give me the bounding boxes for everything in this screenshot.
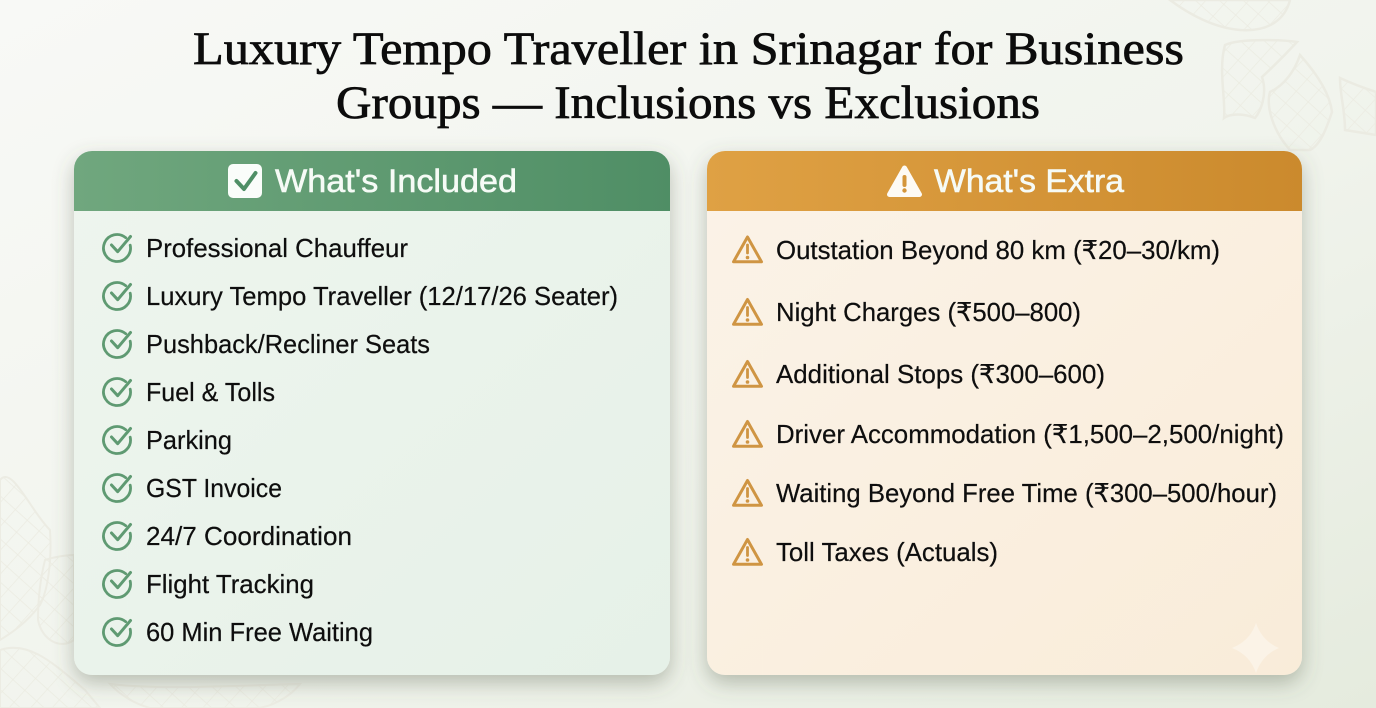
ornament: bottom left lattice (0, 477, 300, 708)
panel card (74, 151, 670, 675)
item: waiting beyond free time: Waiting Beyond Free Time (₹300–500/hour) (776, 478, 1277, 508)
title (193, 23, 1184, 129)
item: gst invoice: GST Invoice (146, 473, 282, 503)
item: additional stops: Additional Stops (₹300–600) (776, 359, 1105, 389)
item: outstation: Outstation Beyond 80 km (₹20–30/km) (776, 235, 1220, 265)
icon: white warning triangle (890, 168, 920, 194)
item: driver accommodation: Driver Accommodation (₹1,500–2,500/night) (776, 419, 1284, 449)
ornament: top right lattice (1170, 0, 1376, 150)
panel card (707, 151, 1302, 675)
item: 60 min free waiting: 60 Min Free Waiting (146, 617, 373, 647)
heading: What's Included (275, 163, 517, 199)
item: fuel and tolls: Fuel & Tolls (146, 377, 275, 407)
item: professional chauffeur: Professional Chauffeur (146, 233, 408, 263)
header bar (707, 151, 1302, 211)
icon: sparkle (1232, 623, 1279, 673)
heading: What's Extra (934, 163, 1124, 199)
item: pushback seats: Pushback/Recliner Seats (146, 329, 430, 359)
header bar (74, 151, 670, 211)
title: Groups — Inclusions vs Exclusions (336, 77, 1040, 129)
item: night charges: Night Charges (₹500–800) (776, 297, 1081, 327)
item: parking (103, 425, 232, 455)
item: 24/7 coordination: 24/7 Coordination (146, 521, 352, 551)
item: parking: Parking (146, 425, 232, 455)
item: flight tracking: Flight Tracking (146, 569, 314, 599)
item: toll taxes: Toll Taxes (Actuals) (776, 537, 998, 567)
icon: white checkbox (228, 164, 262, 198)
panel: what's included (74, 151, 670, 675)
panel: what's extra (707, 151, 1302, 675)
title: Luxury Tempo Traveller in Srinagar for Business (193, 23, 1184, 75)
item: luxury tempo traveller: Luxury Tempo Traveller (12/17/26 Seater) (146, 281, 618, 311)
